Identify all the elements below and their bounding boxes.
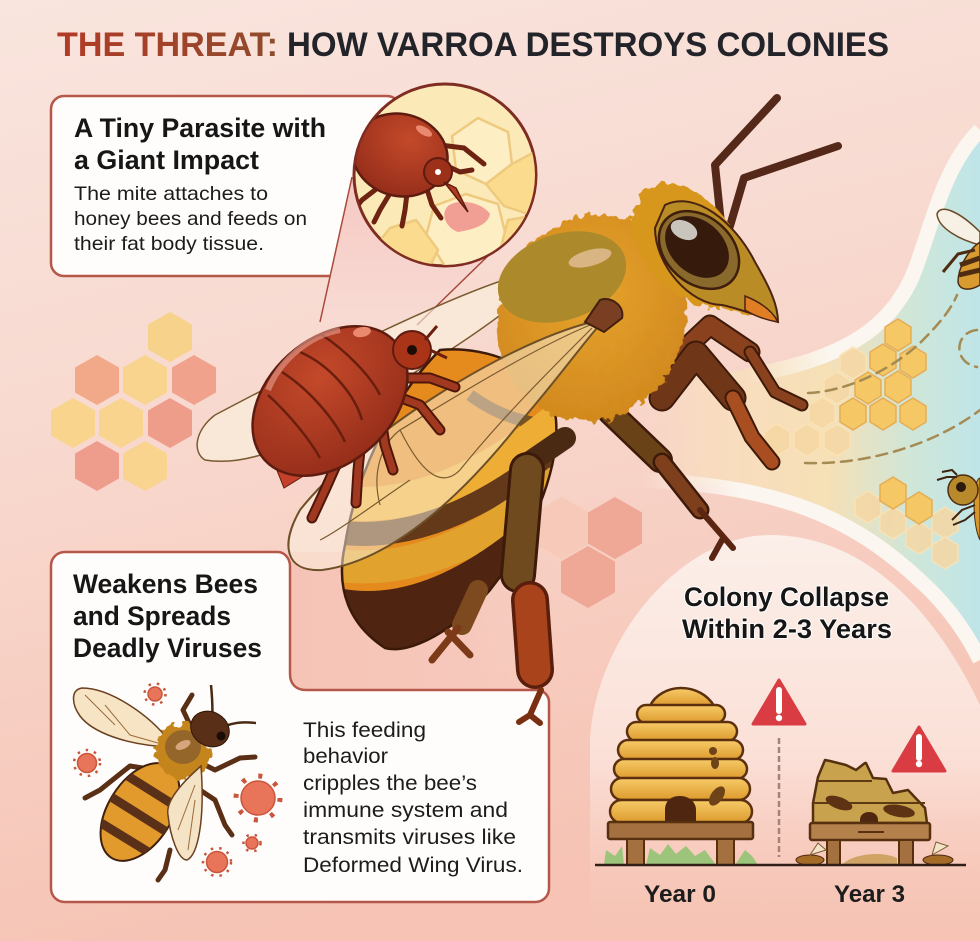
small bee: lower right xyxy=(937,470,980,540)
right honeycomb xyxy=(764,319,958,569)
back wing xyxy=(197,278,520,461)
grass xyxy=(604,844,758,865)
year labels xyxy=(644,881,905,908)
title: THE THREAT: xyxy=(57,26,278,64)
head xyxy=(630,184,778,322)
infected bee illustration xyxy=(74,685,256,886)
hind leg xyxy=(518,438,565,723)
thorax xyxy=(468,188,716,448)
dashed timeline divider xyxy=(778,738,780,857)
panel body text: immune system and xyxy=(303,799,508,822)
front legs xyxy=(660,325,802,462)
dashed flight paths xyxy=(805,295,980,463)
middle leg xyxy=(610,412,733,558)
panel: weakens bees xyxy=(51,552,549,902)
panel: tiny parasite xyxy=(51,96,400,276)
decorative honeycomb: center xyxy=(535,497,642,608)
panel heading: and Spreads xyxy=(73,601,231,631)
warning icon: year 0 xyxy=(753,680,805,724)
colony collapse heading: Colony Collapse xyxy=(684,582,889,612)
small bee: top right xyxy=(937,209,980,289)
virus particles xyxy=(74,684,280,876)
colony collapse heading xyxy=(682,582,892,644)
magnified mite circle xyxy=(352,82,538,268)
panel body text xyxy=(74,183,307,255)
feeding wound xyxy=(444,202,490,232)
panel body text: The mite attaches to xyxy=(74,183,268,205)
front wing xyxy=(288,299,622,570)
hive: year 0 xyxy=(604,688,758,865)
panel: notch shading xyxy=(290,552,552,692)
small hind leg xyxy=(432,590,478,660)
panel body text: Deformed Wing Virus. xyxy=(303,854,523,877)
panel heading xyxy=(74,113,326,175)
panel body text: This feeding xyxy=(303,719,426,742)
honey bee illustration xyxy=(197,98,838,723)
panel body text: transmits viruses like xyxy=(303,826,516,849)
year labels: Year 0 xyxy=(644,881,716,908)
panel heading: A Tiny Parasite with xyxy=(74,113,326,143)
abdomen xyxy=(335,349,560,649)
ground line xyxy=(595,864,966,866)
warning icon: year 3 xyxy=(893,727,945,771)
hive: year 3 xyxy=(796,760,953,865)
panel body text: behavior xyxy=(303,745,388,768)
debris and fallen bees xyxy=(796,842,953,865)
colony collapse heading: Within 2-3 Years xyxy=(682,614,892,644)
hive bees xyxy=(706,747,728,808)
panel body text xyxy=(303,719,523,877)
colour band with flight paths xyxy=(640,130,980,660)
panel heading: Deadly Viruses xyxy=(73,633,262,663)
panel heading: a Giant Impact xyxy=(74,145,259,175)
varroa mite on bee xyxy=(223,296,455,518)
dead bees in hive xyxy=(824,793,916,820)
title: HOW VARROA DESTROYS COLONIES xyxy=(287,26,889,64)
panel body text: honey bees and feeds on xyxy=(74,208,307,230)
decorative honeycomb: left xyxy=(51,312,216,491)
connector wedge to magnifier xyxy=(320,177,492,325)
panel heading: Weakens Bees xyxy=(73,569,258,599)
panel heading xyxy=(73,569,262,663)
panel body text: cripples the bee’s xyxy=(303,772,477,795)
year labels: Year 3 xyxy=(834,881,905,908)
colony collapse backdrop xyxy=(590,535,980,941)
antennae xyxy=(715,98,838,233)
panel body text: their fat body tissue. xyxy=(74,233,264,255)
